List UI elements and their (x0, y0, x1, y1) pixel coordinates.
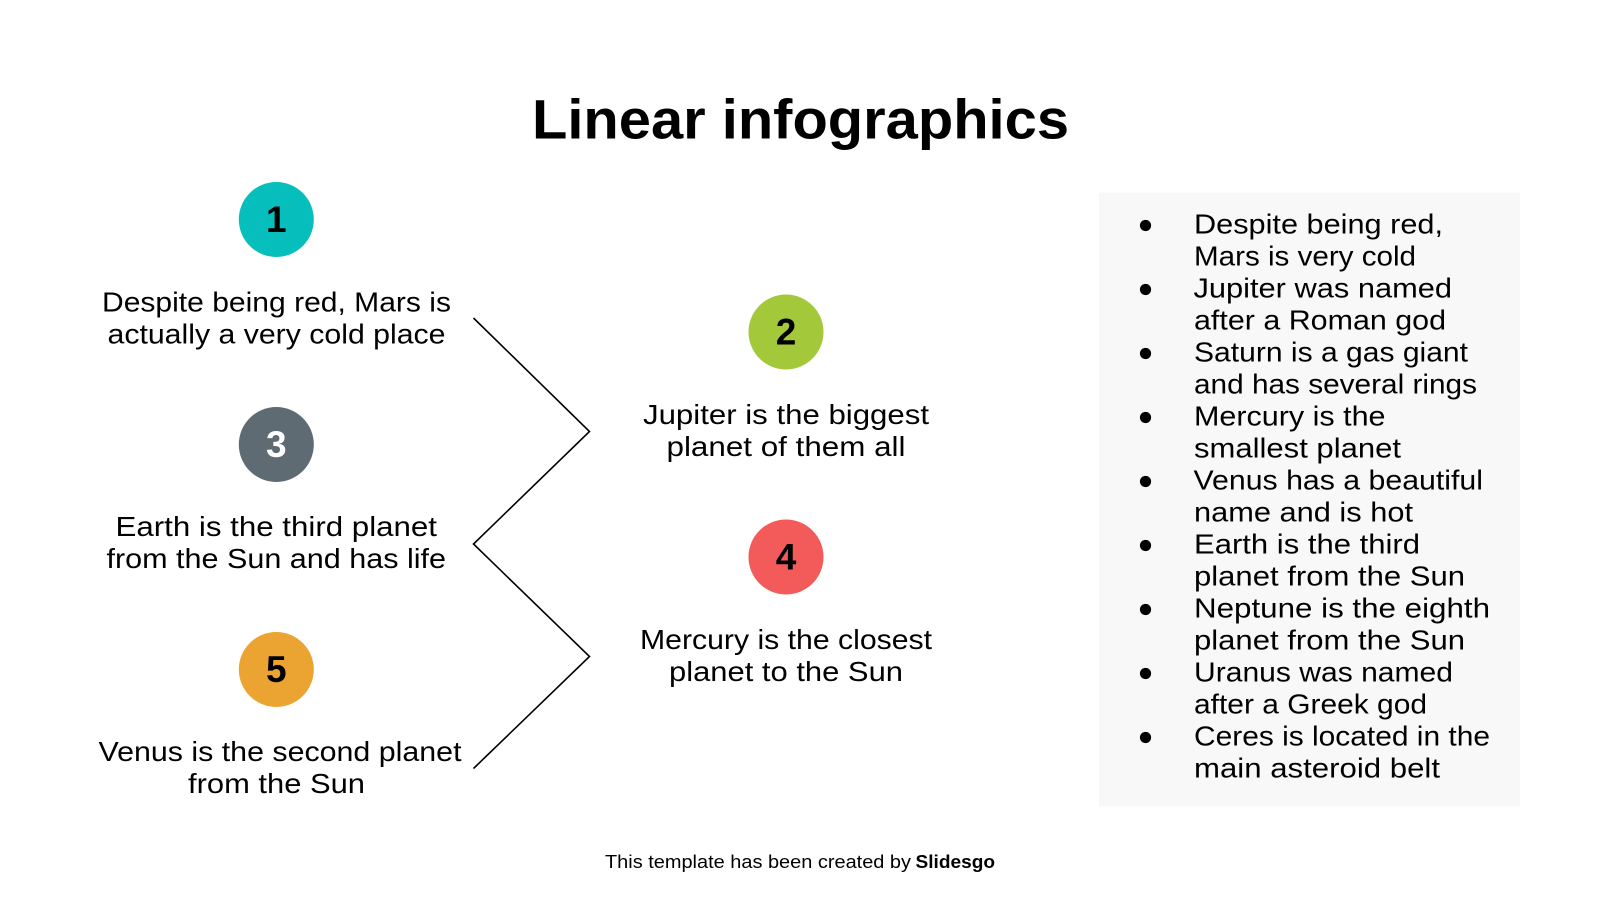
step 4 (640, 520, 932, 687)
list text: Mercury is the (1194, 400, 1386, 432)
list text: name and is hot (1194, 496, 1413, 528)
list text (1194, 208, 1490, 784)
text: step 2 description: planet of them all (666, 431, 906, 462)
icon: number 5 circle: 5 (266, 649, 287, 690)
list text: smallest planet (1194, 432, 1401, 464)
footer credit: Slidesgo (916, 852, 995, 872)
panel: planet facts list (1099, 192, 1520, 806)
title: Linear infographics (532, 88, 1069, 150)
text: step 3 description (106, 511, 446, 574)
icon: number 1 circle: 1 (266, 199, 287, 240)
icon: number 3 circle: 3 (266, 424, 287, 465)
icon: number 2 circle: 2 (776, 312, 796, 352)
text: step 4 description: Mercury is the closest (640, 624, 932, 655)
step 5 (98, 632, 462, 799)
icon: number 4 circle (748, 520, 824, 594)
list text: Earth is the third (1194, 528, 1420, 560)
list text: Mars is very cold (1194, 240, 1416, 272)
list text: Despite being red, (1194, 208, 1443, 240)
list text: Neptune is the eighth (1194, 592, 1490, 624)
step 1 (102, 182, 451, 350)
text: step 3 description: from the Sun and has life (106, 543, 446, 574)
icon: number 4 circle: 4 (776, 536, 797, 578)
icon: number 3 circle (239, 407, 314, 482)
list text: and has several rings (1194, 368, 1477, 400)
list text: main asteroid belt (1194, 752, 1440, 784)
text: step 5 description (98, 736, 462, 799)
text: step 3 description: Earth is the third planet (116, 511, 437, 542)
text: step 1 description: actually a very cold place (108, 318, 446, 350)
text: step 1 description: Despite being red, Mars is (102, 286, 451, 318)
zigzag connector line (474, 318, 590, 768)
bullets (1140, 220, 1151, 743)
list text: planet from the Sun (1194, 624, 1465, 656)
list text: Saturn is a gas giant (1194, 336, 1468, 368)
icon: number 1 circle (239, 182, 314, 257)
text: step 4 description: planet to the Sun (669, 656, 903, 687)
list text: after a Roman god (1194, 304, 1446, 336)
text: step 2 description: Jupiter is the biggest (643, 399, 929, 430)
list text: Ceres is located in the (1194, 720, 1490, 752)
footer credit: This template has been created by (605, 852, 911, 872)
text: step 4 description (640, 624, 932, 687)
list text: Venus has a beautiful (1194, 464, 1483, 496)
list text: planet from the Sun (1194, 560, 1465, 592)
list text: Uranus was named (1194, 656, 1453, 688)
list text: Jupiter was named (1194, 272, 1452, 304)
text: step 2 description (643, 399, 929, 462)
text: step 1 description (102, 286, 451, 350)
icon: number 5 circle (239, 632, 314, 707)
step 2 (643, 294, 929, 462)
list text: after a Greek god (1194, 688, 1427, 720)
icon: number 2 circle (748, 294, 824, 370)
step 3 (106, 407, 446, 574)
text: step 5 description: Venus is the second planet (98, 736, 462, 767)
text: step 5 description: from the Sun (188, 768, 365, 799)
